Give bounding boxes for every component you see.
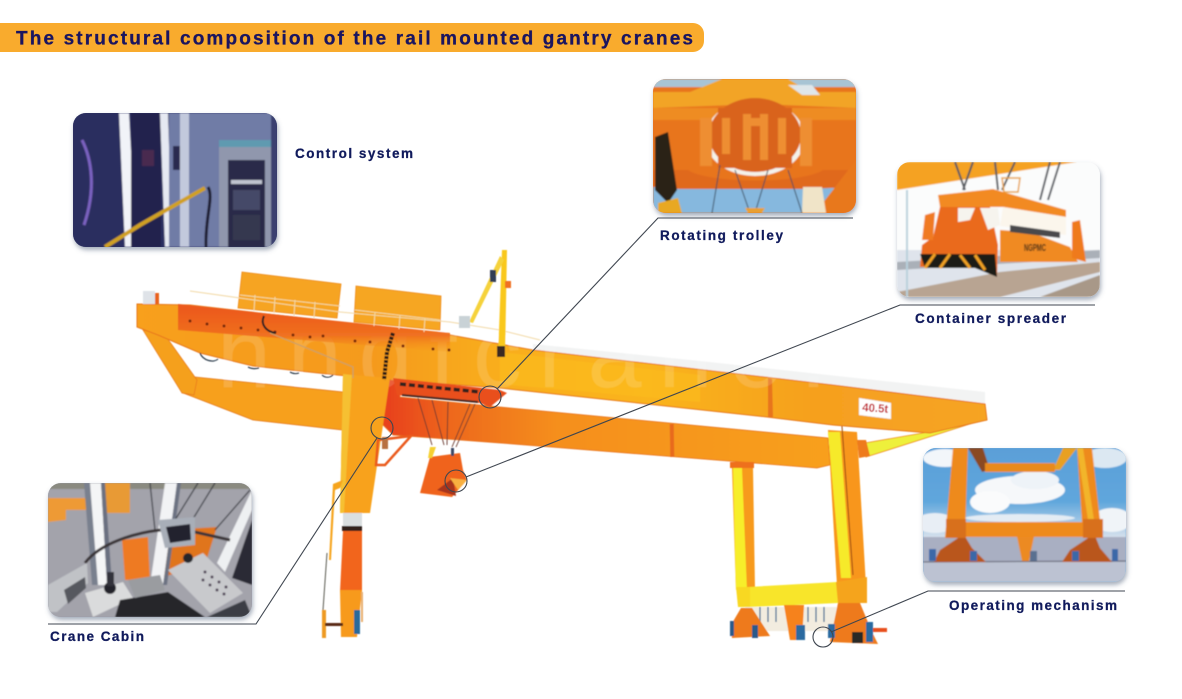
rear right leg xyxy=(730,462,755,590)
label: control system: Control system xyxy=(295,146,413,161)
panel: operating mechanism xyxy=(915,448,1132,613)
label: operating mechanism: Operating mechanism xyxy=(949,598,1117,613)
cabin frame under girder xyxy=(376,436,411,465)
deck bolts xyxy=(188,320,450,352)
cable loops xyxy=(200,353,333,377)
title banner: The structural composition of the rail mounted gantry cranes xyxy=(16,28,693,50)
deck railings xyxy=(190,291,540,340)
panel: rotating trolley xyxy=(653,79,856,243)
panel: control system xyxy=(73,113,413,247)
end brace xyxy=(143,330,197,395)
rotating trolley photo xyxy=(653,79,856,213)
bright panel on girder xyxy=(500,352,700,402)
label: container spreader: Container spreader xyxy=(915,311,1067,326)
left end handrail xyxy=(143,291,159,304)
machine house 1 xyxy=(238,272,341,318)
right bogies and wheels xyxy=(730,603,887,644)
operating mechanism photo xyxy=(915,448,1132,582)
left main leg xyxy=(340,374,390,513)
front right leg xyxy=(828,386,867,603)
label: crane cabin: Crane Cabin xyxy=(50,629,144,644)
rotating trolley xyxy=(393,378,507,407)
jib crane xyxy=(459,250,511,357)
panel: crane cabin xyxy=(48,483,252,644)
rear lower girder xyxy=(183,377,343,430)
capacity plate 40.5t xyxy=(859,398,891,419)
gantry crane illustration xyxy=(137,250,987,644)
container spreader photo: NGPMC xyxy=(1024,243,1046,254)
label: rotating trolley: Rotating trolley xyxy=(660,228,783,243)
girder stiffeners xyxy=(768,378,773,417)
capacity plate 40.5t: 40.5t xyxy=(862,402,889,416)
control system photo xyxy=(73,113,277,247)
access ladder xyxy=(384,333,393,380)
title banner xyxy=(0,23,704,52)
girder splice xyxy=(670,424,674,457)
main upper girder xyxy=(137,304,987,433)
crane cabin photo xyxy=(48,483,252,617)
outrigger brace xyxy=(857,423,973,458)
hose and pipe xyxy=(263,316,353,378)
left leg lower section xyxy=(322,480,363,638)
watermark: hndfcrane. xyxy=(217,299,827,408)
leader lines and callout circles xyxy=(48,218,1125,647)
walkway rail on main girder xyxy=(533,344,985,405)
deck strip xyxy=(178,304,450,352)
hanging spreader xyxy=(420,447,467,497)
panel: container spreader xyxy=(897,162,1100,326)
machine house 2 xyxy=(354,286,441,330)
bottom sill beam xyxy=(748,582,838,607)
container spreader photo xyxy=(897,162,1100,297)
hoist ropes xyxy=(418,398,475,447)
front lower girder xyxy=(378,378,830,468)
